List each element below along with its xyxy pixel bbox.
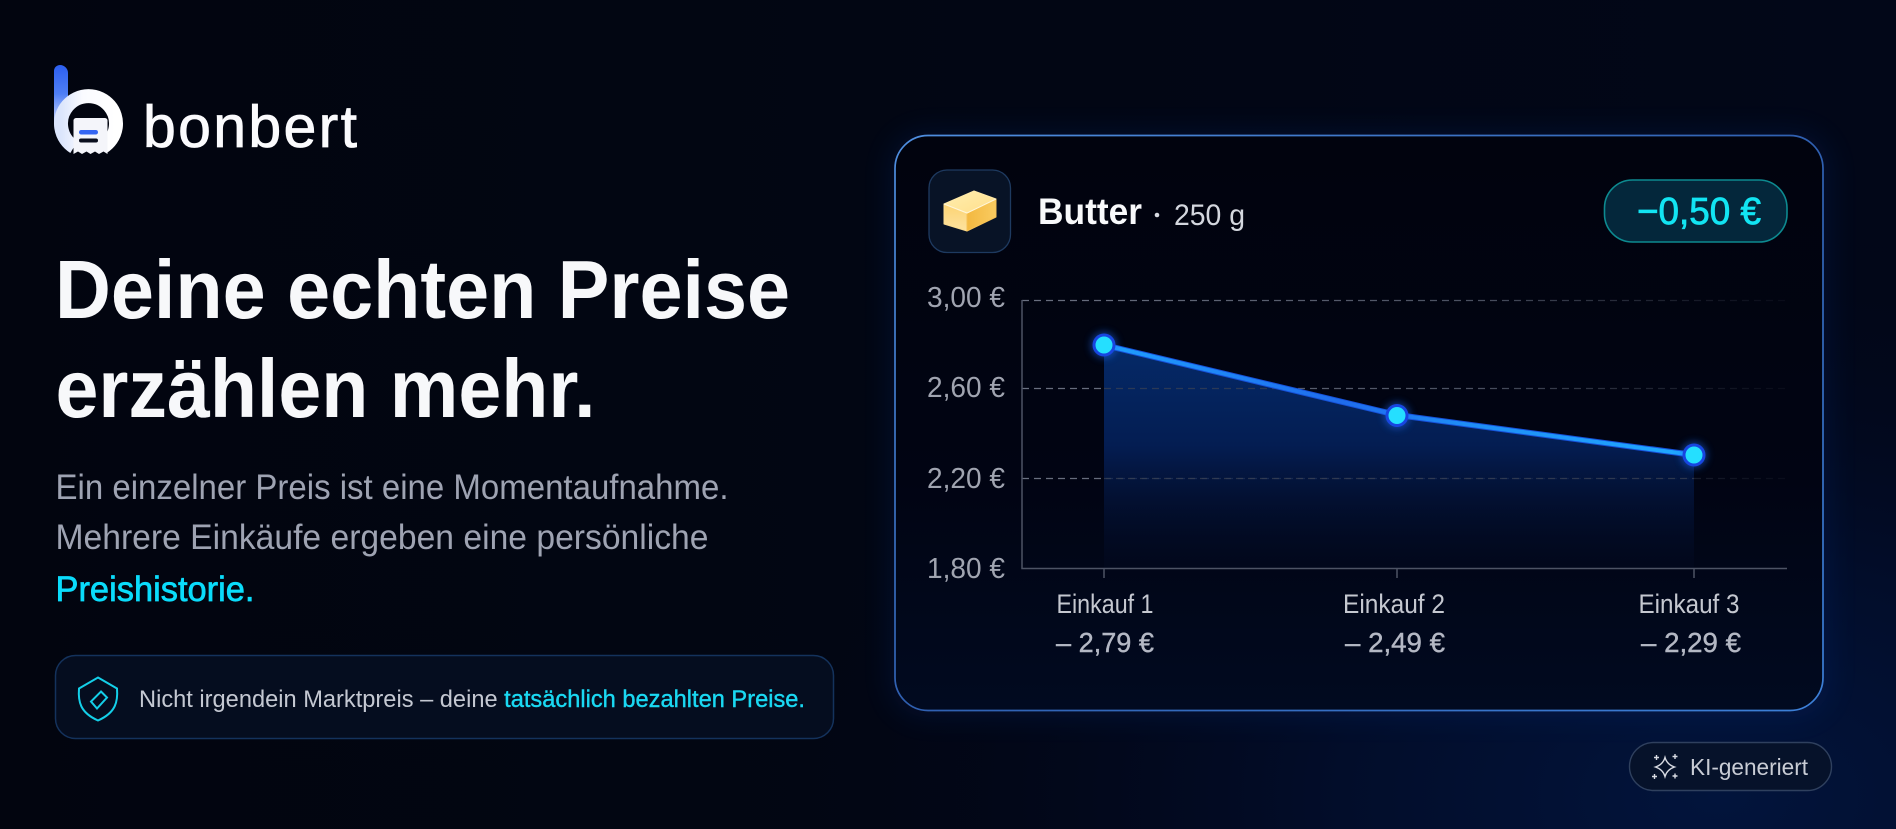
- product title: 250 g: [1174, 199, 1245, 232]
- y axis labels: 3,00 €: [927, 282, 1005, 314]
- callout text: Nicht irgendein Marktpreis – deine tatsächlich bezahlten Preise.: [139, 686, 805, 713]
- x axis labels: – 2,49 €: [1345, 627, 1445, 658]
- x axis labels: [1056, 589, 1741, 658]
- icon: receipt b mark: [54, 65, 116, 154]
- icon: sparkles: [1652, 754, 1678, 779]
- callout: [56, 656, 834, 738]
- headline: erzählen mehr.: [56, 342, 596, 435]
- icon: shield with tag: [79, 678, 117, 720]
- y axis labels: [927, 282, 1005, 585]
- icon: butter block: [929, 170, 1010, 252]
- line chart: [927, 282, 1787, 658]
- x axis labels: – 2,79 €: [1056, 627, 1154, 658]
- x axis labels: Einkauf 2: [1343, 589, 1445, 619]
- y axis labels: 2,20 €: [927, 463, 1005, 495]
- product title: Butter: [1038, 191, 1142, 232]
- panel: butter price history card: [890, 132, 1830, 717]
- wordmark: bonbert: [143, 94, 357, 160]
- body text: [56, 468, 728, 609]
- data points: [1091, 332, 1707, 468]
- product title: [1038, 191, 1245, 232]
- badge: price change: −0,50 €: [1637, 191, 1761, 233]
- badge: KI-generiert: [1630, 742, 1832, 790]
- headline: [55, 243, 790, 435]
- y axis labels: 2,60 €: [927, 372, 1005, 404]
- logo: bonbert: [54, 65, 357, 160]
- body text: Mehrere Einkäufe ergeben eine persönliche: [56, 518, 708, 557]
- x axis labels: Einkauf 3: [1638, 589, 1740, 619]
- headline: Deine echten Preise: [55, 243, 790, 336]
- body text: Preishistorie.: [56, 570, 254, 609]
- body text: Ein einzelner Preis ist eine Momentaufnahme.: [56, 468, 728, 507]
- x axis labels: Einkauf 1: [1056, 589, 1154, 619]
- price area: [1104, 345, 1694, 568]
- price line: [1104, 345, 1694, 455]
- y axis labels: 1,80 €: [927, 553, 1005, 585]
- badge: KI-generiert: KI-generiert: [1690, 754, 1808, 780]
- x axis labels: – 2,29 €: [1641, 627, 1741, 658]
- badge: price change: [1604, 180, 1787, 242]
